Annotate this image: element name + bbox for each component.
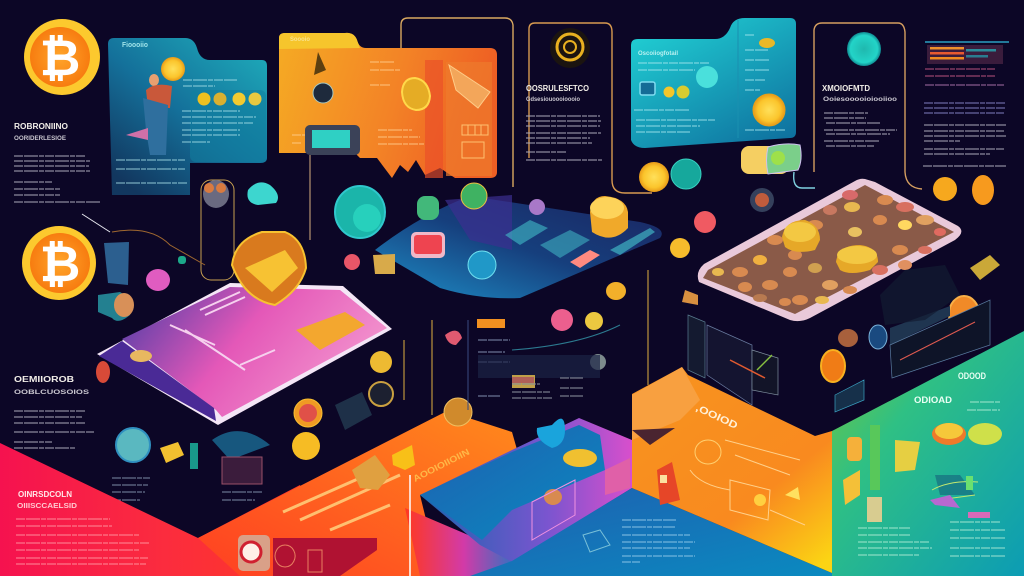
green panel text [858,402,1005,556]
scattered coins [712,190,946,306]
icon: gold swirl coin [550,28,590,68]
panel: red bottom left [0,443,330,576]
text block: left upper [14,122,100,202]
gold stacks [782,220,878,273]
panel: teal folder right [631,18,796,148]
bottom magenta strip [405,508,512,576]
orange folder heading: Soooio [290,37,310,43]
outline icons [275,545,322,572]
panel: purple blue box [420,418,632,562]
card text [526,84,602,160]
device screen [305,125,360,155]
panel: dark card with teal coin [814,23,922,189]
sketch lines [690,440,805,525]
panel: orange folder [279,18,513,240]
coins [932,423,1002,445]
bitcoin coin lower [22,226,96,300]
panel: orange sheet bottom centre [198,411,520,576]
pale pole [409,475,411,576]
shapes [843,425,990,522]
sheet heading: AOOIOIIOIIN [411,447,471,484]
folder text: Oscoiiogfotail [638,51,678,57]
folder text: Fioooiio [122,42,148,49]
bitcoin coin top: ₿ [40,30,80,86]
green headings: ODIOAD [914,395,953,405]
green headings [914,371,986,405]
blue box coins [532,419,630,540]
gold stack [590,196,628,238]
gold shield coin [232,232,306,305]
folder icons [640,38,785,126]
panel: orange box centre right [632,367,832,573]
panel: centre blue platform [375,195,662,298]
gold objects on orange sheet [352,398,472,490]
card text: Ooiesooooioiooiioo [823,97,897,103]
document sketch [449,65,490,108]
vertical lines and markers centre [404,270,698,415]
text block: left middle: OEMIIOROB [14,375,74,384]
folder text [116,42,256,183]
orange folder text [292,62,424,144]
coloured sheet [296,312,365,350]
text block: left middle: OOBLCUOSOIOS [14,390,89,396]
sheet lines [170,292,275,370]
icons and screen on box right [821,255,1000,412]
small coins around book [96,292,393,500]
coin on book [130,350,152,362]
right text column with bar chart [923,42,1009,166]
panel: green teal wedge [832,331,1024,576]
coin row [161,57,262,106]
dashboard cells [505,220,655,268]
green headings: ODOOD [958,371,986,381]
card text: OOSRULESFTCO [526,84,589,93]
red screen [411,232,445,258]
panel: dark card with gold swirl coin [526,23,652,193]
teal lens [335,186,385,238]
icon: red kiosk [657,462,680,505]
text block: left upper: OORIDERLESIOE [14,136,66,142]
card text [822,84,897,146]
folder text [634,35,785,132]
blue panel text [583,520,695,562]
bitcoin coin lower: ₿ [40,236,80,292]
coins top right [933,175,994,205]
red panel text: OINRSDCOLN [18,490,72,499]
panel: blue bottom triangle [470,488,832,576]
panel: isometric coin tray [698,179,961,321]
icon: coin badge [238,535,270,571]
bitcoin coin top [24,19,100,95]
gold blobs [695,440,800,506]
text block: left upper: ROBRONIINO [14,122,68,131]
icon: globe coin [313,83,333,103]
card: yellow green token [741,144,815,188]
orange box heading: ,OOIOD [694,403,739,432]
red panel text: OIIISCCAELSID [17,503,77,510]
icon: gold ring [402,78,430,110]
small floating icons [82,180,487,291]
red panel text [16,490,150,564]
panel: pink isometric book [97,283,392,425]
circular dial [468,251,496,279]
panel: teal folder [108,38,267,195]
dark red box [273,538,377,576]
purple orb [529,199,545,215]
card text: XMOIOFMTD [822,84,870,93]
text block: left middle [14,375,94,448]
sketched grid [462,125,488,158]
bar chart [927,45,1003,64]
card text: Gdsesiouoooioooio [526,97,580,103]
person figure [126,74,172,155]
sheet sketch [283,475,400,530]
dark box: charts under tray [688,315,778,405]
hanging icon [314,52,326,75]
icon: teal coin [847,32,881,66]
floating coins centre right [639,159,774,258]
